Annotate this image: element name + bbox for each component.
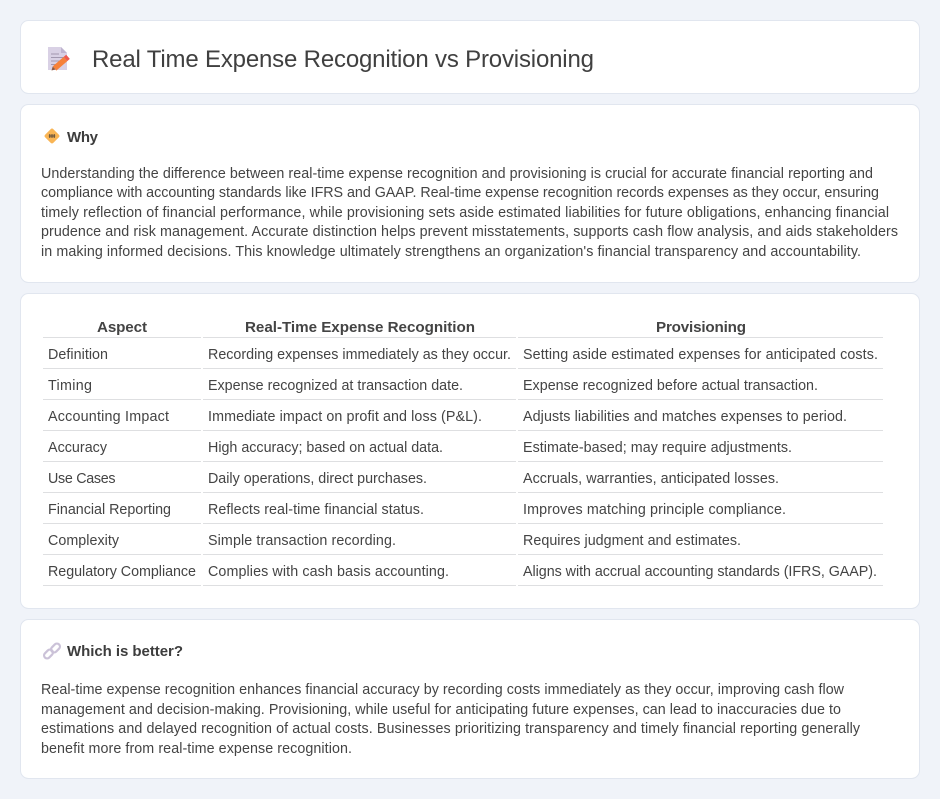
which is better paragraph: benefit more from real-time expense recognition. xyxy=(41,741,352,757)
table rows: Use Cases xyxy=(48,471,116,487)
table rows: Estimate-based; may require adjustments. xyxy=(523,440,792,456)
table rows: Adjusts liabilities and matches expenses to period. xyxy=(523,409,847,425)
icon: document with pencil xyxy=(48,47,68,70)
table rows: Accruals, warranties, anticipated losses. xyxy=(523,471,779,487)
table rows: Expense recognized at transaction date. xyxy=(208,378,463,394)
table rows: Improves matching principle compliance. xyxy=(523,502,786,518)
table rows: Expense recognized before actual transaction. xyxy=(523,378,818,394)
table rows: Setting aside estimated expenses for anticipated costs. xyxy=(523,347,878,363)
which is better paragraph: estimations and delayed recognition of actual costs. Businesses prioritizing transparency and timely financial reporting generally xyxy=(41,721,861,737)
table rows xyxy=(48,347,878,580)
which is better paragraph: Real-time expense recognition enhances financial accuracy by recording costs immediately as they occur, improving cash flow xyxy=(41,682,845,698)
heading: why: Why xyxy=(67,129,99,146)
table rows: Recording expenses immediately as they occur. xyxy=(208,347,511,363)
table rows: Complies with cash basis accounting. xyxy=(208,564,449,580)
title text: Real Time Expense Recognition vs Provisioning xyxy=(92,46,594,73)
table rows: Simple transaction recording. xyxy=(208,533,396,549)
table rows: Definition xyxy=(48,347,108,363)
table rows: Daily operations, direct purchases. xyxy=(208,471,427,487)
table header: Real-Time Expense Recognition xyxy=(245,319,475,336)
why paragraph: prudence and risk management. Accurate distinction helps prevent misstatements, supports cash flow analysis, and aids stakeholders xyxy=(41,224,898,240)
table header xyxy=(97,319,746,336)
table rules xyxy=(43,338,883,586)
panel: comparison table xyxy=(20,294,920,608)
table rows: Financial Reporting xyxy=(48,502,171,518)
why paragraph: timely reflection of financial performance, while provisioning sets aside estimated liabilities for future obligations, enhancing financial xyxy=(41,205,889,221)
table rows: Requires judgment and estimates. xyxy=(523,533,741,549)
panel: which is better xyxy=(20,620,920,778)
why paragraph: Understanding the difference between real-time expense recognition and provisioning is crucial for accurate financial reporting and xyxy=(41,166,873,182)
icon: chain link xyxy=(43,642,61,660)
table header: Provisioning xyxy=(656,319,746,336)
table rows: Aligns with accrual accounting standards (IFRS, GAAP). xyxy=(523,564,877,580)
panel: why xyxy=(20,104,920,282)
why paragraph xyxy=(41,166,898,260)
table rows: Timing xyxy=(48,378,92,394)
table rows: Regulatory Compliance xyxy=(48,564,196,580)
table rows: High accuracy; based on actual data. xyxy=(208,440,443,456)
table rows: Immediate impact on profit and loss (P&L). xyxy=(208,409,482,425)
table header: Aspect xyxy=(97,319,147,336)
heading: which is better: Which is better? xyxy=(67,643,183,660)
panel: title xyxy=(20,20,920,94)
table rows: Accuracy xyxy=(48,440,108,456)
table rows: Complexity xyxy=(48,533,120,549)
which is better paragraph: management and decision-making. Provisioning, while useful for anticipating future expenses, can lead to inaccuracies due to xyxy=(41,702,841,718)
which is better paragraph xyxy=(41,682,861,757)
table rows: Accounting Impact xyxy=(48,409,169,425)
why paragraph: in making informed decisions. This knowledge ultimately strengthens an organization's financial transparency and accountability. xyxy=(41,244,861,260)
table rows: Reflects real-time financial status. xyxy=(208,502,424,518)
why paragraph: compliance with accounting standards like IFRS and GAAP. Real-time expense recognition records expenses as they occur, ensuring xyxy=(41,185,879,201)
icon: warning diamond xyxy=(44,128,60,144)
